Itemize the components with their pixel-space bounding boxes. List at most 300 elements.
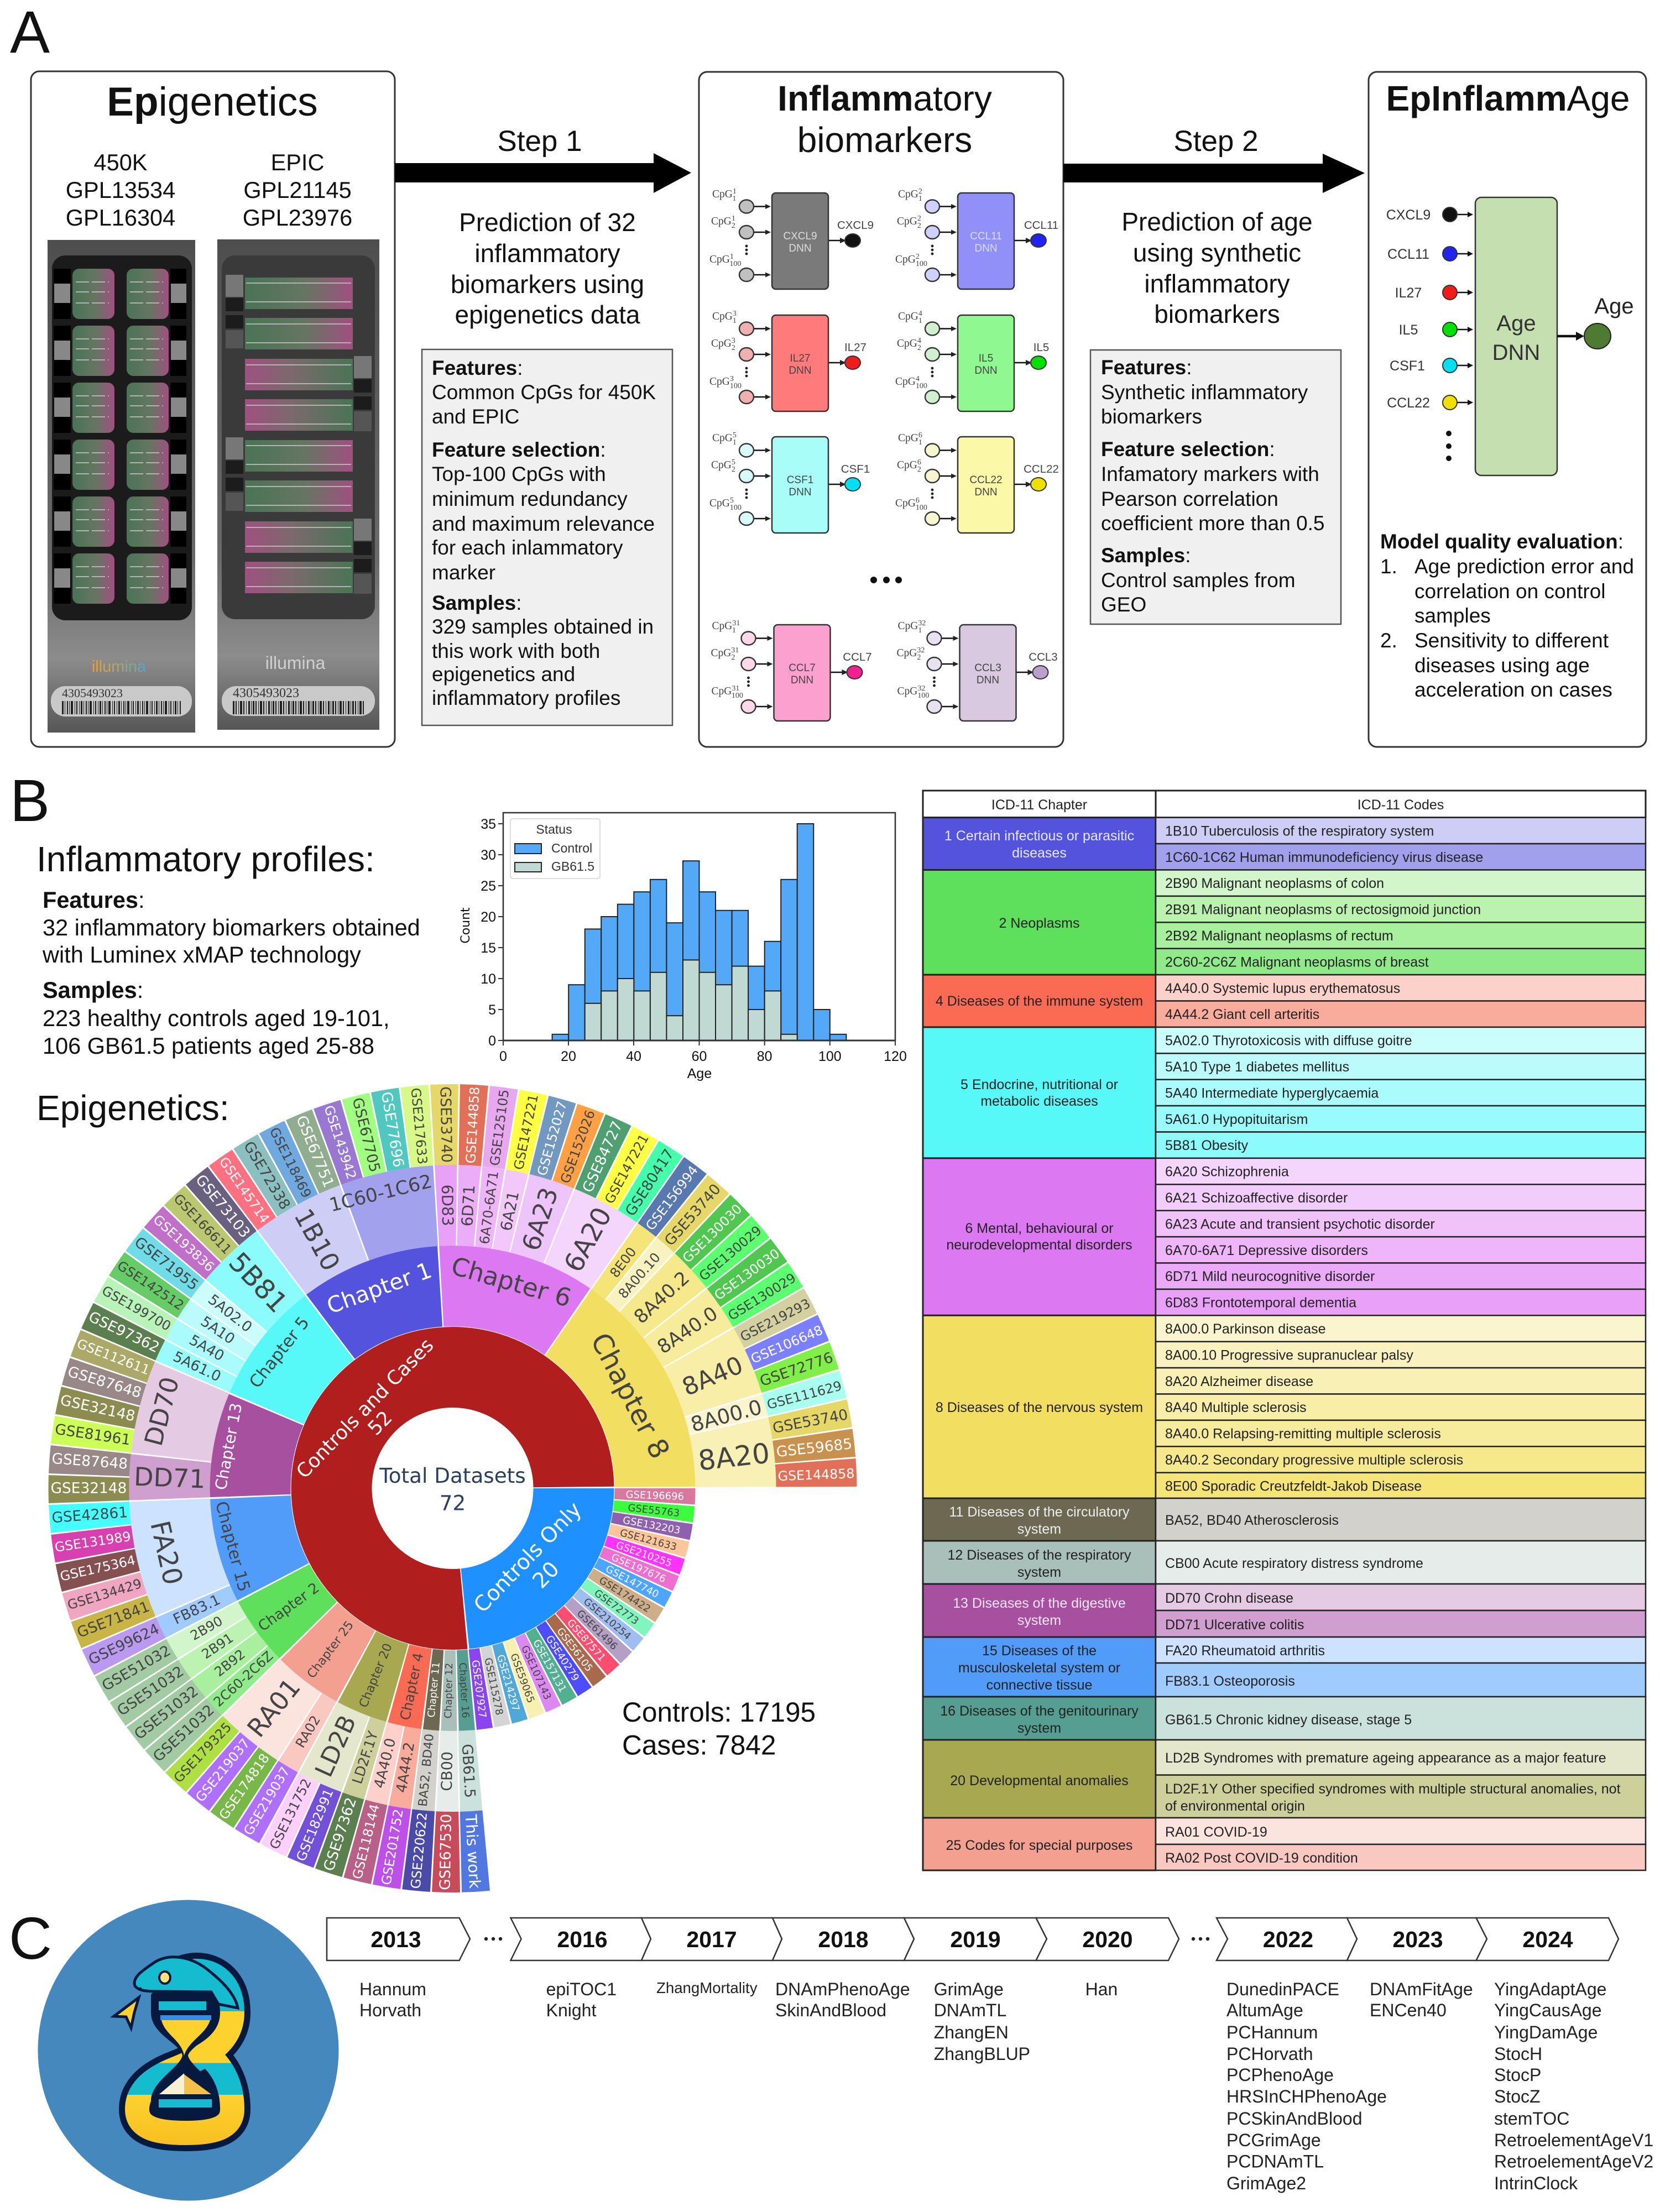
labels: years: 2019 xyxy=(950,1927,1001,1952)
labels: case datasets: GSE106648 xyxy=(749,1322,825,1367)
biomarker DNN: CCL11: CCL11 xyxy=(970,231,1002,242)
label: Step 2: Step 2 xyxy=(1173,125,1259,158)
biomarker DNN: IL5: 2 xyxy=(917,344,921,352)
table: code rows: LD2F.1Y Other specified syndromes with multiple structural anomalies, not xyxy=(1165,1781,1621,1797)
label: controls only: 20 xyxy=(528,1557,565,1593)
panel: step 1 details box: 329 samples obtained in xyxy=(432,615,654,638)
labels: years: 2018 xyxy=(818,1927,869,1952)
labels: controls-only datasets: GSE197676 xyxy=(609,1551,667,1585)
text: model quality evaluation xyxy=(1380,530,1634,701)
biomarker DNN: CCL11: CpG xyxy=(897,216,917,227)
labels: ICD-11 codes: 1C60-1C62 xyxy=(327,1170,434,1216)
table: code rows: 8E00 Sporadic Creutzfeldt-Jakob Disease xyxy=(1165,1478,1422,1494)
table: chapter names: 25 Codes for special purposes xyxy=(946,1838,1132,1853)
labels: controls-only datasets: GSE196696 xyxy=(625,1489,684,1503)
labels: case datasets: GSE219293 xyxy=(738,1295,813,1345)
table: chapter names: 1 Certain infectious or parasitic xyxy=(944,828,1134,844)
labels: ICD-11 codes: 8E00 xyxy=(607,1244,640,1280)
labels: case datasets: GSE42861 xyxy=(51,1504,128,1526)
biomarker DNN: IL27 xyxy=(709,310,866,411)
biomarker DNN: CCL7: 1 xyxy=(732,626,736,635)
biomarker DNN: CCL22: CCL22 xyxy=(969,474,1003,486)
labels: case datasets: GSE147221 xyxy=(511,1093,541,1171)
label: controls and cases: 52 xyxy=(364,1407,397,1440)
biomarker DNN: IL5: 4 xyxy=(918,310,922,318)
text: model quality evaluation: Model quality evaluation: xyxy=(1380,530,1624,553)
box: Age DNN: DNN xyxy=(1492,341,1540,365)
text: controls and cases totals: Controls: 17195 xyxy=(622,1697,816,1728)
text: clocks per year: GrimAge xyxy=(934,1979,1004,1999)
table: code rows: 6A21 Schizoaffective disorder xyxy=(1165,1190,1348,1206)
labels: years: 2017 xyxy=(686,1927,737,1952)
legend: Status: GB61.5 xyxy=(551,859,594,874)
biomarker DNN: CXCL9: CpG xyxy=(709,254,730,265)
labels: case datasets: GSE81961 xyxy=(54,1421,132,1449)
biomarker DNN: CCL7: 2 xyxy=(731,653,735,662)
labels: ICD-11 codes: 8A00.0 xyxy=(688,1395,764,1437)
panel: step 1 details box: Top-100 CpGs with xyxy=(432,463,606,485)
labels: ICD-11 codes: FB83.1 xyxy=(171,1592,223,1628)
labels: ICD-11 codes: 8A20 xyxy=(697,1437,771,1477)
ring: ICD-11 codes xyxy=(52,1088,853,1889)
labels: ICD-11 codes: 4A44.2 xyxy=(393,1741,418,1794)
panel: step 2 details box: coefficient more than 0.5 xyxy=(1101,512,1325,535)
chip: 450K beadchip: illumina xyxy=(92,658,147,676)
panel: step 1 details box xyxy=(422,349,672,725)
biomarker DNN: CXCL9: 100 xyxy=(729,260,741,268)
table: code rows: GB61.5 Chronic kidney disease, stage 5 xyxy=(1165,1712,1412,1728)
table: chapter names: 11 Diseases of the circulatory xyxy=(949,1504,1130,1520)
text: clocks per year: StocZ xyxy=(1494,2087,1541,2106)
labels: case datasets: GSE112611 xyxy=(75,1336,152,1378)
text: model quality evaluation: 2. xyxy=(1380,629,1397,652)
labels: chapters: Chapter 25 xyxy=(305,1618,357,1681)
output: Age xyxy=(1557,294,1634,349)
labels: ICD-11 codes xyxy=(133,1170,771,1807)
table: code rows: 5A10 Type 1 diabetes mellitus xyxy=(1165,1059,1349,1075)
labels: controls-only datasets: GSE87571 xyxy=(565,1617,608,1664)
labels: ICD-11 codes: 2B91 xyxy=(199,1630,236,1662)
biomarker DNN: CCL7: CpG xyxy=(712,620,732,632)
panel: Inflammatory biomarkers xyxy=(699,72,1063,747)
biomarker inputs: IL27 xyxy=(1395,285,1422,301)
biomarker DNN: CCL3: DNN xyxy=(977,674,999,686)
chip: EPIC beadchip: illumina xyxy=(265,653,325,673)
biomarker DNN: CXCL9: CpG xyxy=(711,216,732,227)
panel: step 1 details box: Features: xyxy=(432,357,523,379)
text: clocks per year: IntrinClock xyxy=(1494,2173,1578,2193)
text: step 2 description: Prediction of age xyxy=(1121,207,1313,236)
text: clocks per year: PCGrimAge xyxy=(1226,2130,1321,2150)
ring: controls only and controls and cases xyxy=(321,1357,584,1620)
labels: case datasets: GSE67705 xyxy=(349,1096,383,1174)
labels: case datasets: GSE77696 xyxy=(378,1091,407,1169)
heading: Inflammatory biomarkers: biomarkers xyxy=(797,120,972,160)
biomarker DNN: IL5: 100 xyxy=(916,382,927,390)
table: code rows: 2B90 Malignant neoplasms of colon xyxy=(1165,876,1384,891)
labels: ICD-11 codes: BA52, BD40 xyxy=(416,1733,437,1807)
labels: chapters: Chapter 8 xyxy=(584,1327,676,1464)
labels: chapters: Chapter 2 xyxy=(255,1580,322,1635)
biomarker inputs xyxy=(1386,207,1473,461)
biomarker DNN: IL27: IL27 xyxy=(844,341,866,354)
biomarker DNN: CCL3: 2 xyxy=(917,653,921,662)
biomarker DNN: CXCL9: DNN xyxy=(789,243,812,254)
biomarker DNN: CCL22: CpG xyxy=(897,459,917,471)
axis: tick labels and titles: 15 xyxy=(481,940,496,956)
output: Age: Age xyxy=(1594,294,1634,318)
labels: controls-only datasets: GSE121633 xyxy=(619,1527,678,1553)
text: clocks per year: stemTOC xyxy=(1494,2109,1569,2129)
labels: ICD-11 codes: 6D71 xyxy=(458,1184,478,1227)
labels: case datasets: GSE67530 xyxy=(437,1814,455,1890)
text: clocks per year: DNAmPhenoAge xyxy=(775,1979,910,1999)
text: step 1 description: inflammatory xyxy=(474,239,620,268)
text: clocks per year: Hannum xyxy=(359,1979,426,1999)
labels: controls-only datasets: GSE132203 xyxy=(622,1514,681,1536)
labels: controls-only datasets: GSE157131 xyxy=(530,1638,568,1695)
biomarker DNN: CXCL9: 1 xyxy=(732,215,735,223)
table: chapter names: 5 Endocrine, nutritional or xyxy=(960,1077,1118,1092)
biomarker DNN: IL5: 1 xyxy=(918,317,922,325)
legend: Status xyxy=(510,819,600,878)
axis: tick labels and titles: 120 xyxy=(884,1049,907,1064)
biomarker inputs: CXCL9 xyxy=(1386,207,1431,223)
text: clocks per year: HRSInCHPhenoAge xyxy=(1226,2087,1387,2106)
text: model quality evaluation: Sensitivity to different xyxy=(1414,629,1609,652)
labels: controls-only datasets: GSE210255 xyxy=(614,1539,674,1570)
biomarker DNN: CCL11: 2 xyxy=(917,222,921,230)
axis: tick labels and titles: 20 xyxy=(561,1049,576,1064)
table: code rows: 4A40.0 Systemic lupus erythematosus xyxy=(1165,981,1400,996)
labels: ICD-11 codes: FA20 xyxy=(144,1518,189,1588)
biomarker DNN: CCL3: CpG xyxy=(898,620,918,632)
axis: tick labels and titles: 5 xyxy=(488,1002,496,1018)
text: clocks per year: YingCausAge xyxy=(1494,2000,1601,2020)
labels: case datasets: GSE71841 xyxy=(75,1598,152,1641)
labels: case datasets: GSE145714 xyxy=(216,1154,273,1226)
labels: case datasets: GSE144858 xyxy=(777,1466,855,1484)
biomarker DNN: CSF1: CSF1 xyxy=(787,474,813,486)
biomarker DNN: CCL3: 32 xyxy=(917,646,925,655)
biomarker DNN: CCL7: CpG xyxy=(711,647,731,659)
panel: step 2 details box: Feature selection: xyxy=(1101,438,1275,461)
text: clocks per year: AltumAge xyxy=(1226,2000,1303,2020)
text: clocks per year: Horvath xyxy=(359,2000,421,2020)
biomarker DNN: CCL3: CCL3 xyxy=(1029,651,1058,663)
labels: case datasets: GSE53740 xyxy=(437,1086,455,1163)
table: chapter names: 6 Mental, behavioural or xyxy=(965,1221,1114,1236)
labels: case datasets: GSE219037 xyxy=(241,1764,293,1838)
biomarker DNN: IL5: CpG xyxy=(898,311,918,322)
labels: case datasets: GSE99624 xyxy=(86,1620,162,1669)
labels: ICD-11 codes: 6A21 xyxy=(497,1190,523,1232)
biomarker DNN: CCL11 xyxy=(895,187,1058,289)
biomarker DNN: IL5: DNN xyxy=(974,365,998,376)
axis: tick labels and titles: 40 xyxy=(626,1049,641,1064)
labels: chapters: Chapter 11 xyxy=(426,1661,442,1718)
labels: case datasets: GSE125105 xyxy=(487,1089,512,1167)
bars: control plus GB61.5 stacked counts xyxy=(552,824,846,1040)
text: clocks per year: DunedinPACE xyxy=(1226,1979,1339,1999)
text: step 2 description: inflammatory xyxy=(1144,269,1290,298)
labels: case datasets: GSE87648 xyxy=(66,1363,143,1402)
biomarker DNN: CCL7: 100 xyxy=(732,692,743,700)
biomarker DNN: CCL22: 1 xyxy=(918,438,922,447)
biomarker inputs: CCL22 xyxy=(1387,395,1430,411)
labels: case datasets xyxy=(51,1086,855,1890)
chip: 450K beadchip xyxy=(48,240,195,733)
text: step 2 description: biomarkers xyxy=(1154,300,1280,328)
table: chapter names: 8 Diseases of the nervous system xyxy=(936,1400,1143,1415)
panel letter C: C xyxy=(9,1905,52,1972)
biomarker DNN: CCL11: CpG xyxy=(898,189,918,200)
table: chapter names: 16 Diseases of the genitourinary xyxy=(940,1703,1139,1719)
label: 450K platforms: GPL13534 xyxy=(66,177,175,203)
table: code rows: 4A44.2 Giant cell arteritis xyxy=(1165,1007,1319,1022)
labels: case datasets: GSE174818 xyxy=(216,1750,273,1822)
labels: case datasets: GSE51032 xyxy=(150,1701,218,1765)
text: model quality evaluation: correlation on control xyxy=(1414,580,1606,603)
panel: step 2 details box: Samples: xyxy=(1101,544,1191,567)
biomarker DNN: CXCL9: CpG xyxy=(712,189,733,200)
labels: ICD-11 codes: 5A02.0 xyxy=(205,1291,255,1336)
heading: Epigenetics sunburst: Epigenetics: xyxy=(36,1088,229,1128)
table: code rows: 5A02.0 Thyrotoxicosis with diffuse goitre xyxy=(1165,1033,1412,1049)
labels: ICD-11 codes: 5A61.0 xyxy=(170,1348,223,1385)
labels: ICD-11 codes: 5A40 xyxy=(186,1332,227,1364)
table: chapter names: musculoskeletal system or xyxy=(958,1660,1120,1676)
labels: case datasets: GSE67751 xyxy=(293,1113,337,1190)
table: code rows: RA02 Post COVID-19 condition xyxy=(1165,1850,1358,1866)
label: 450K platforms: GPL16304 xyxy=(66,205,175,231)
biomarker DNN: IL27: 2 xyxy=(732,344,735,352)
labels: ICD-11 codes: 8A40.2 xyxy=(630,1267,694,1328)
panel letter B: B xyxy=(10,767,50,834)
text: step 1 description: epigenetics data xyxy=(455,300,640,329)
biomarker DNN: CCL7: CpG xyxy=(711,686,732,697)
biomarker DNN: CCL11: CCL11 xyxy=(1024,219,1058,232)
labels: controls-only datasets: GSE55763 xyxy=(627,1502,680,1519)
text: model quality evaluation: samples xyxy=(1414,604,1491,627)
labels: case datasets: GSE182991 xyxy=(293,1787,337,1864)
biomarker DNN: IL27: CpG xyxy=(709,376,730,388)
labels: case datasets: GSE220622 xyxy=(408,1812,430,1890)
biomarker DNN: CCL22 xyxy=(895,431,1059,533)
labels: case datasets: GSE179325 xyxy=(170,1719,234,1786)
table: code rows: 8A40 Multiple sclerosis xyxy=(1165,1400,1307,1415)
labels: case datasets: GSE144858 xyxy=(463,1086,483,1164)
table: code rows: 1B10 Tuberculosis of the respiratory system xyxy=(1165,823,1434,839)
axis: tick labels and titles: 100 xyxy=(818,1049,842,1064)
labels: ICD-11 codes: 6D83 xyxy=(438,1184,457,1226)
table: chapter names: system xyxy=(1017,1521,1061,1537)
table: chapter names: connective tissue xyxy=(986,1677,1092,1693)
labels: years: 2020 xyxy=(1082,1927,1133,1952)
panel: step 1 details box: Common CpGs for 450K xyxy=(432,381,656,404)
text: inflammatory profile features and samples: Samples: xyxy=(43,977,143,1003)
labels: ICD-11 codes: DD70 xyxy=(139,1374,185,1449)
arrow: Step 1 xyxy=(395,153,691,193)
text: clocks per year: PCPhenoAge xyxy=(1226,2065,1334,2085)
biomarker DNN: IL5: 4 xyxy=(917,337,921,345)
labels: ICD-11 codes: 6A23 xyxy=(516,1184,564,1254)
arrow: Step 2 xyxy=(1063,154,1365,193)
biomarker DNN: IL27: IL27 xyxy=(790,353,810,364)
labels: years xyxy=(370,1927,1573,1952)
table: code rows: BA52, BD40 Atherosclerosis xyxy=(1165,1513,1339,1528)
text: clocks per year: ENCen40 xyxy=(1370,2000,1447,2020)
labels: chapters: Chapter 12 xyxy=(442,1662,455,1718)
labels: ICD-11 codes: GB61.5 xyxy=(458,1744,478,1798)
panel: step 2 details box: Control samples from xyxy=(1101,569,1296,592)
chart: age histogram xyxy=(459,813,907,1081)
labels: controls-only datasets: GSE207927 xyxy=(469,1659,488,1719)
biomarker DNN: CCL3: 32 xyxy=(918,619,926,627)
table: code rows: DD71 Ulcerative colitis xyxy=(1165,1617,1304,1633)
biomarker DNN: CCL7: 31 xyxy=(732,684,739,693)
text: clocks per year xyxy=(359,1979,1653,2193)
chip: 450K beadchip: 4305493023 xyxy=(62,686,123,700)
table: chapter names: 13 Diseases of the digestive xyxy=(953,1596,1126,1611)
axis: tick labels and titles xyxy=(459,817,907,1081)
text: step 1 description: biomarkers using xyxy=(451,270,644,299)
biomarker DNN: CXCL9: CXCL9 xyxy=(783,231,817,242)
table: code rows: 5B81 Obesity xyxy=(1165,1138,1249,1153)
text: clocks per year: PCSkinAndBlood xyxy=(1226,2109,1362,2129)
table: code rows: 2B92 Malignant neoplasms of rectum xyxy=(1165,928,1393,944)
panel: step 1 details box: Samples: xyxy=(432,592,521,614)
axis: tick labels and titles: 10 xyxy=(481,971,496,987)
text: clocks per year: SkinAndBlood xyxy=(775,2000,886,2020)
table: chapter names: neurodevelopmental disorders xyxy=(946,1237,1132,1253)
legend: Status: Status xyxy=(536,822,572,836)
panel: step 1 details box: marker xyxy=(432,561,495,584)
text: model quality evaluation: Age prediction error and xyxy=(1414,555,1634,578)
text: model quality evaluation: diseases using age xyxy=(1414,654,1590,677)
biomarker DNN: CCL11: CpG xyxy=(895,254,916,265)
table: code rows: 6A70-6A71 Depressive disorders xyxy=(1165,1243,1368,1258)
table: chapter names: 12 Diseases of the respiratory xyxy=(947,1547,1131,1563)
panel letter A: A xyxy=(10,0,50,65)
biomarker DNN: IL5 xyxy=(895,310,1049,411)
biomarker DNN: CCL22: CpG xyxy=(895,498,916,509)
legend: Status: Control xyxy=(551,841,592,855)
biomarker DNN: CXCL9: 1 xyxy=(732,195,736,203)
panel: step 2 details box: GEO xyxy=(1101,593,1146,616)
biomarker DNN: CSF1: CpG xyxy=(709,498,730,509)
biomarker DNN: IL27: 1 xyxy=(733,317,737,325)
biomarker DNN: CSF1: CpG xyxy=(711,459,732,471)
text: clocks per year: DNAmTL xyxy=(934,2000,1006,2020)
biomarker DNN: CSF1: 5 xyxy=(732,458,735,467)
labels: case datasets: GSE152027 xyxy=(534,1100,570,1178)
labels: years: 2022 xyxy=(1263,1927,1313,1952)
table: chapter names: diseases xyxy=(1012,845,1067,861)
labels: controls-only datasets: GSE59065 xyxy=(508,1652,536,1704)
text: clocks per year: StocH xyxy=(1494,2044,1542,2064)
biomarker DNN: CCL11: 100 xyxy=(916,260,927,268)
table: chapter names: system xyxy=(1017,1613,1061,1628)
panel: step 2 details box: Synthetic inflammatory xyxy=(1101,381,1308,404)
panel: step 1 details box: and maximum relevance xyxy=(432,513,655,535)
labels: case datasets: GSE72338 xyxy=(240,1138,294,1212)
labels: ICD-11 codes: 2C60-2C6Z xyxy=(211,1648,276,1710)
labels: case datasets: GSE87648 xyxy=(51,1450,128,1473)
table: code rows: 8A40.0 Relapsing-remitting multiple sclerosis xyxy=(1165,1426,1441,1442)
panel: step 1 details box: and EPIC xyxy=(432,405,519,428)
biomarker DNN: CSF1: 5 xyxy=(733,431,737,440)
labels: chapters xyxy=(211,1251,676,1722)
labels: case datasets: GSE51032 xyxy=(99,1642,174,1695)
center label: total datasets: 72 xyxy=(440,1491,466,1515)
table: code rows: RA01 COVID-19 xyxy=(1165,1824,1267,1840)
biomarker DNN: CCL11: 2 xyxy=(917,215,921,223)
biomarker DNN: CCL11: 1 xyxy=(918,195,922,203)
text: clocks per year: epiTOC1 xyxy=(546,1979,617,1999)
table: code rows: 8A20 Alzheimer disease xyxy=(1165,1374,1313,1389)
label: 450K platforms: 450K xyxy=(94,149,148,175)
labels: chapters: Chapter 13 xyxy=(212,1402,246,1492)
labels: case datasets: GSE219037 xyxy=(192,1735,253,1805)
table header: ICD-11 Chapter xyxy=(991,797,1087,813)
labels: chapters: Chapter 6 xyxy=(448,1251,575,1313)
labels: ICD-11 codes: CB00 xyxy=(439,1751,456,1791)
text: inflammatory profile features and samples xyxy=(42,887,420,1059)
text: clocks per year: YingAdaptAge xyxy=(1494,1979,1606,1999)
biomarker DNN: CCL7: CCL7 xyxy=(789,662,816,674)
panel: step 1 details box: epigenetics and xyxy=(432,663,575,686)
text: clocks per year: StocP xyxy=(1494,2065,1541,2085)
panel: step 1 details box: Feature selection: xyxy=(432,438,606,461)
text: inflammatory profile features and samples: with Luminex xMAP technology xyxy=(42,942,361,968)
table: code rows: DD70 Crohn disease xyxy=(1165,1591,1293,1606)
labels: case datasets: GSE32148 xyxy=(59,1392,137,1425)
box: Age DNN: Age xyxy=(1496,311,1536,336)
text: clocks per year: PCHannum xyxy=(1226,2022,1318,2042)
axis: tick labels and titles: 35 xyxy=(481,817,496,832)
labels: case datasets: GSE53740 xyxy=(771,1406,849,1437)
labels: case datasets: GSE59685 xyxy=(775,1435,853,1461)
text: clocks per year: GrimAge2 xyxy=(1226,2173,1306,2193)
biomarker DNN: CCL11: DNN xyxy=(974,243,998,254)
biomarker DNN: CCL22: CpG xyxy=(898,432,918,444)
labels: case datasets: GSE130030 xyxy=(711,1246,782,1303)
labels: case datasets: GSE193836 xyxy=(150,1212,217,1275)
labels: case datasets: GSE130029 xyxy=(725,1270,798,1324)
table: code rows: LD2B Syndromes with premature ageing appearance as a major feature xyxy=(1165,1750,1606,1766)
labels: chapters: Chapter 4 xyxy=(397,1651,426,1722)
heading: Epigenetics: Epigenetics xyxy=(107,80,318,124)
labels: ICD-11 codes: DD71 xyxy=(133,1462,206,1494)
labels: ICD-11 codes: 8A00.10 xyxy=(615,1249,664,1301)
table: code rows: 6A20 Schizophrenia xyxy=(1165,1164,1289,1180)
labels: ICD-11 codes: 1B10 xyxy=(288,1204,346,1276)
labels: years: 2024 xyxy=(1522,1927,1573,1952)
biomarker DNN: CXCL9 xyxy=(709,187,874,289)
biomarker DNN: CXCL9: 2 xyxy=(732,222,735,230)
labels: case datasets: GSE131752 xyxy=(267,1776,315,1852)
biomarker DNN: CCL22: 6 xyxy=(918,431,922,440)
table: code rows: 5A40 Intermediate hyperglycaemia xyxy=(1165,1085,1379,1101)
text: clocks per year: RetroelementAgeV1 xyxy=(1494,2130,1653,2150)
labels: years: 2016 xyxy=(557,1927,608,1952)
table: code rows: 8A40.2 Secondary progressive multiple sclerosis xyxy=(1165,1452,1463,1468)
biomarker DNN: CCL22: 100 xyxy=(916,504,927,512)
table: chapter names: system xyxy=(1017,1721,1061,1736)
label: EPIC platforms: GPL21145 xyxy=(243,177,352,203)
biomarker DNN: CCL3: 100 xyxy=(917,692,929,700)
